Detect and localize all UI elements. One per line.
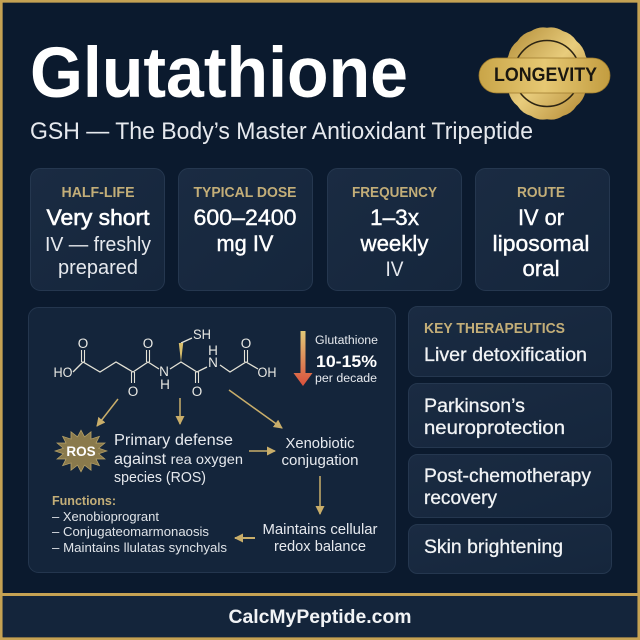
molecule: glutathione structure: H [208,343,218,358]
molecule: glutathione structure: O [241,336,251,351]
panel: key therapeutics liver [408,306,612,376]
stat: glutathione decline [315,335,378,385]
card: Parkinson's neuroprotection: neuroprotection [424,417,565,439]
subtitle: GSH — The Body’s Master Antioxidant Tripeptide [30,118,533,145]
panel: key therapeutics liver: KEY THERAPEUTICS [424,321,565,337]
icon: decline arrow [294,331,312,386]
functions list: – Conjugateomarmonaosis [52,525,209,539]
title: Glutathione [30,34,408,113]
panel: mechanism [28,308,396,572]
stat card: typical dose: TYPICAL DOSE [194,185,297,201]
stat card: typical dose: 600–2400 [194,205,296,230]
molecule: glutathione structure: N [159,364,169,379]
text: primary defense: species (ROS) [114,470,206,486]
stat card: frequency: weekly [359,231,428,256]
stat card: frequency: IV [386,258,404,281]
text: primary defense [114,432,243,486]
molecule: glutathione structure [54,327,276,399]
icon: ROS burst: ROS [66,444,96,459]
text: xenobiotic conjugation: Xenobiotic [286,436,354,452]
stat card: frequency: FREQUENCY [352,185,437,201]
card: post-chemotherapy recovery [408,454,612,518]
molecule: glutathione structure: O [192,384,202,399]
footer: CalcMyPeptide.com [228,607,412,628]
arrow: molecule to xenobiotic conjugation [229,390,282,428]
molecule: glutathione structure: H [160,377,170,392]
badge: longevity [479,27,610,120]
stat card: half-life: prepared [58,257,138,279]
stat: glutathione decline: Glutathione [315,335,378,347]
stat card: half-life [30,168,164,290]
stat card: frequency: 1–3x [370,205,419,230]
arrow: defense to conjugation [249,450,275,452]
stat card: half-life: IV — freshly [45,234,151,256]
card: skin brightening [408,524,612,574]
molecule: glutathione structure: N [208,355,218,370]
footer [2,593,638,637]
card: skin brightening: Skin brightening [424,536,563,558]
text: primary defense: against rea oxygen [114,451,243,468]
molecule: glutathione structure: O [78,336,88,351]
card: Parkinson's neuroprotection [408,384,612,448]
molecule: glutathione structure: HO [54,365,72,380]
stat card: frequency [328,168,462,290]
arrow: redox to functions [235,537,255,539]
stat card: half-life: HALF-LIFE [62,185,135,201]
text: redox balance: redox balance [274,538,366,555]
functions list [52,494,227,555]
stat card: typical dose [178,168,312,290]
stat: glutathione decline: per decade [315,373,377,385]
stat: glutathione decline: 10-15% [316,352,377,371]
stat card: route: liposomal [492,231,590,256]
molecule: glutathione structure: O [128,384,138,399]
arrow: molecule to primary defense [179,398,181,424]
molecule: glutathione structure: O [143,336,153,351]
text: xenobiotic conjugation [282,436,358,469]
stat card: route: IV or [518,205,564,230]
text: primary defense: Primary defense [114,432,233,449]
stat card: half-life: Very short [46,205,150,230]
molecule: glutathione structure: OH [258,365,276,380]
stat card: route: oral [522,256,560,281]
arrow: conjugation to redox [319,476,321,514]
text: redox balance: Maintains cellular [262,521,378,538]
card: Parkinson's neuroprotection: Parkinson’s [424,395,525,417]
molecule: glutathione structure: SH [193,327,211,342]
stat card: typical dose: mg IV [216,231,274,256]
card: post-chemotherapy recovery: Post-chemotherapy [424,465,591,487]
functions list: Functions: [52,494,116,508]
icon: ROS burst [55,430,107,472]
arrow: molecule to ROS [97,399,118,426]
text: redox balance [262,521,378,555]
badge: longevity: LONGEVITY [494,65,597,86]
stat card: route [476,168,610,290]
text: xenobiotic conjugation: conjugation [282,453,358,469]
functions list: – Maintains llulatas synchyals [52,541,227,555]
functions list: – Xenobioprogrant [52,510,160,524]
card: post-chemotherapy recovery: recovery [424,487,497,509]
panel: key therapeutics liver: Liver detoxification [424,344,587,366]
stat card: route: ROUTE [517,185,565,201]
